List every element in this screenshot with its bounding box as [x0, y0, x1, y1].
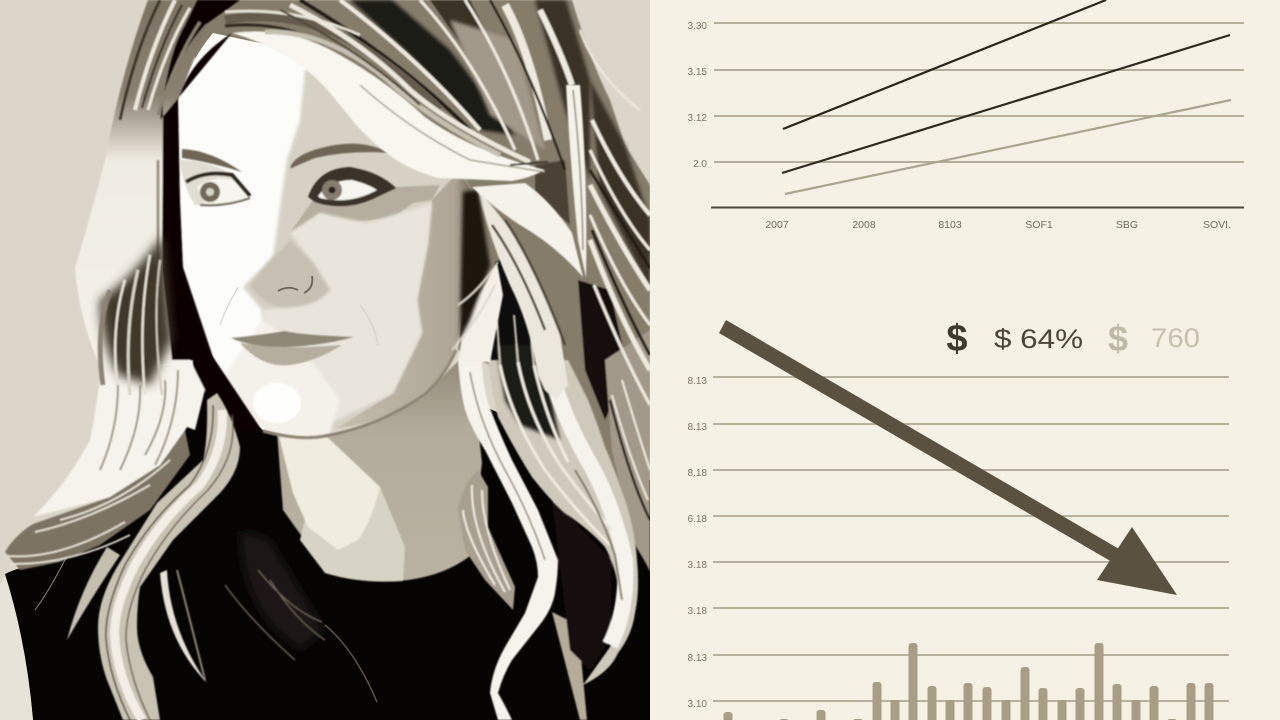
line chart y labels: 3.30: [688, 21, 707, 32]
cheek light patch: [262, 203, 432, 427]
lower y labels: 8.18: [688, 468, 707, 479]
line chart x labels: SOF1: [1025, 219, 1053, 231]
lower left hair: [5, 235, 240, 720]
grey stripes in white mass: [100, 370, 178, 470]
left hair silhouette: [75, 0, 215, 430]
dollar icon light: $: [1108, 318, 1128, 359]
wisps beside cheek: [452, 262, 498, 350]
lower y labels: 8.13: [688, 653, 707, 664]
lower y labels: [688, 376, 707, 710]
line series: top dark: [783, 0, 1106, 129]
band stripes: [497, 310, 625, 645]
sweep stripes: [225, 5, 548, 172]
line chart y labels: 3.12: [688, 113, 707, 124]
line chart: [688, 0, 1244, 231]
chin shadow line: [263, 350, 456, 438]
lower face light area: [225, 320, 340, 436]
hair sweep over forehead: [225, 5, 583, 277]
arrow: downward trend: [719, 320, 1177, 595]
panel: charts background: [650, 0, 1280, 720]
nose shadow: [250, 240, 330, 307]
thin locks lower left: [67, 547, 120, 640]
tail stripes: [8, 460, 170, 564]
lower y labels: 8.13: [688, 422, 707, 433]
lower left hair strands: [100, 255, 162, 395]
lower y labels: 6.18: [688, 514, 707, 525]
right side shadow band: [337, 170, 476, 428]
bar and trend chart: [688, 320, 1229, 720]
vertical band dark line: [573, 90, 583, 250]
light stripes right: [340, 0, 650, 500]
line chart x labels: 2008: [852, 219, 876, 231]
lower grid lines: [713, 377, 1229, 701]
lock three stripes: [492, 220, 565, 345]
line chart y labels: [688, 21, 707, 170]
line chart y labels: 2.0: [693, 159, 707, 170]
small lock stripes: [463, 485, 510, 592]
stat value 760: 760: [1151, 323, 1200, 353]
face: [178, 33, 476, 438]
line chart x axis: [711, 206, 1244, 208]
front hair locks right: [452, 85, 638, 720]
shaded right side of face: [243, 57, 475, 435]
line chart grid lines: [714, 23, 1244, 162]
thin lock centre: [160, 570, 207, 683]
line chart x labels: [765, 219, 1231, 231]
dollar icon dark: $: [946, 318, 968, 360]
left hair: [75, 0, 263, 432]
dark hair masses: [350, 0, 650, 440]
small lock behind: [458, 470, 515, 610]
white mass: [33, 360, 193, 517]
bare shoulder: [0, 576, 33, 720]
line chart x labels: 2007: [765, 219, 789, 231]
line series: light: [785, 100, 1231, 194]
nostril: [278, 276, 312, 293]
left eye: [180, 160, 251, 206]
lower y labels: 3.10: [688, 699, 707, 710]
dark behind locks: [552, 500, 612, 670]
second white lock: [472, 183, 583, 277]
tan hair top: [450, 20, 545, 150]
right eyebrow: [290, 144, 390, 168]
S-curve lock: [98, 393, 240, 720]
black strip beside face: [160, 0, 263, 432]
right eye: [308, 167, 396, 206]
lock three from sweep: [478, 190, 568, 400]
stat row: [946, 318, 1200, 360]
left eyebrow: [182, 149, 242, 172]
white lock beside cheek: [458, 262, 503, 362]
lower y labels: 3.18: [688, 606, 707, 617]
black top: [5, 350, 650, 720]
striped band: [488, 360, 638, 685]
neck: [277, 350, 482, 582]
lower y labels: 8.13: [688, 376, 707, 387]
faint strands over top: [35, 530, 377, 702]
mouth: [231, 331, 354, 365]
line series: middle dark: [782, 35, 1230, 173]
stat value 64%: $ 64%: [994, 324, 1083, 354]
under-eye shadow: [290, 185, 440, 233]
tail of left lock: [5, 430, 190, 570]
dark stripes right: [300, 0, 650, 520]
S-lock stripes: [106, 405, 233, 720]
bars: [724, 643, 1214, 720]
dark beside cheek: [460, 190, 490, 340]
dark gap in band: [496, 345, 560, 440]
smile lines: [220, 287, 378, 345]
face base: [178, 33, 475, 437]
dark lower left patch: [100, 235, 172, 385]
line chart x labels: SOVI.: [1203, 219, 1231, 231]
panel: portrait illustration: [0, 0, 650, 720]
line chart x labels: SBG: [1116, 219, 1138, 231]
white vertical band: [566, 85, 586, 278]
lower y labels: 3.18: [688, 560, 707, 571]
chin highlight: [253, 383, 301, 423]
lower centre lock: [552, 612, 587, 720]
main lock dark edge: [470, 372, 545, 560]
tan hair right lower: [605, 330, 650, 570]
main white lock: [458, 360, 558, 720]
line chart y labels: 3.15: [688, 67, 707, 78]
right hair mass: [170, 0, 650, 572]
line chart x labels: 8103: [938, 219, 962, 231]
upper left hair stripes: [120, 0, 200, 260]
